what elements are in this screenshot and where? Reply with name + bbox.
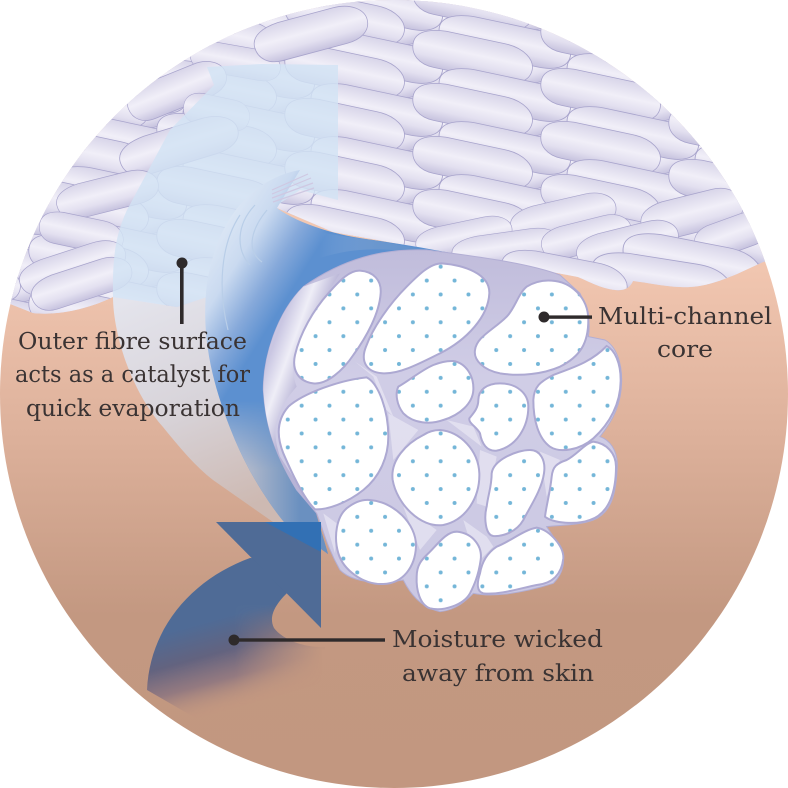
swoosh over arrow head [265,522,321,552]
fibre body [263,250,622,612]
leader: multi-channel core [538,312,592,322]
label: outer fibre surface: acts as a catalyst for [15,362,250,388]
arrow head [216,522,321,628]
junction highlights [323,362,560,563]
label: outer fibre surface [15,329,250,422]
woven fabric surface [10,0,765,314]
channels with moisture dots [279,263,621,609]
blue moisture swoosh [205,170,448,554]
moisture arrow [147,522,321,710]
fibre rim highlight [263,273,340,513]
translucent blue evaporation overlay [113,64,338,307]
arrow tail [147,558,315,710]
label: multi-channel core: core [657,337,713,363]
leader: moisture wicked [228,634,385,646]
label: outer fibre surface: quick evaporation [26,396,240,422]
leader: outer fibre surface [176,258,188,324]
label: moisture wicked away from skin [392,627,603,687]
label: moisture wicked away from skin: Moisture wicked [392,627,603,653]
label: outer fibre surface: Outer fibre surface [18,329,247,355]
fibre cross-section with channels [263,250,622,612]
label: multi-channel core: Multi-channel [598,304,772,330]
grey evaporation funnel [113,297,284,522]
label: moisture wicked away from skin: away from skin [402,661,594,687]
label: multi-channel core [598,304,772,363]
